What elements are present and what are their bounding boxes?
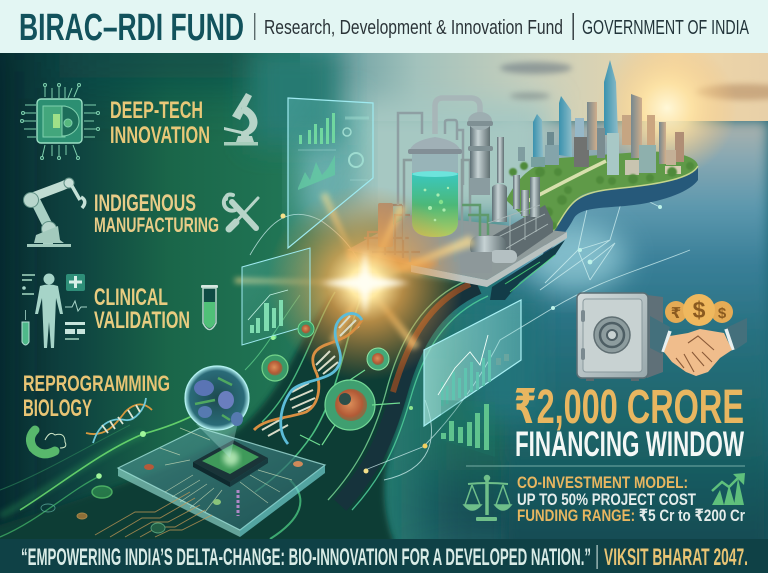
bioreactor [408, 137, 462, 237]
label: indigenous: INDIGENOUS [94, 190, 196, 217]
theme: deep-tech innovation [20, 84, 258, 160]
water band [542, 166, 698, 258]
floating bar chart [441, 400, 489, 450]
label: validation: VALIDATION [94, 307, 190, 334]
project cost share: UP TO 50% PROJECT COST [517, 490, 696, 509]
icon: protein [30, 430, 66, 454]
factory on slab [347, 98, 567, 300]
dark ribbon ground [0, 275, 480, 545]
icon: coins: $ [718, 305, 727, 322]
theme: clinical validation [22, 274, 218, 348]
icon: chip [20, 84, 100, 160]
slab [347, 215, 567, 280]
icon: test tube [201, 285, 218, 330]
icon: coins: $ [693, 297, 706, 323]
icon: scales [464, 476, 511, 521]
pale water inside curve [523, 224, 627, 292]
theme: reprogramming biology [23, 371, 170, 454]
city skyline [518, 60, 684, 175]
icon: small DNA [86, 398, 152, 443]
left pipework [364, 205, 420, 258]
icon: coins [665, 294, 733, 326]
island with city [506, 60, 698, 258]
icon: growth chart [712, 473, 745, 505]
icon: robot arm [24, 178, 85, 247]
magnified cell orb [185, 366, 249, 458]
network lines over the water [250, 190, 690, 480]
footer band [0, 539, 768, 573]
central starburst [235, 185, 475, 381]
icon: human body and data [22, 274, 87, 348]
label: manufacturing: MANUFACTURING [94, 214, 219, 237]
label: innovation: INNOVATION [110, 122, 210, 149]
funding range: FUNDING RANGE: ₹5 Cr to ₹200 Cr [517, 506, 745, 525]
large DNA helix [254, 313, 362, 444]
label: deep-tech: DEEP-TECH [110, 97, 203, 124]
under-slab circuits [490, 240, 565, 300]
hologram panel: upper dashboard [288, 98, 373, 248]
header band [0, 0, 768, 53]
green glow lights [96, 336, 275, 479]
biological cells [262, 321, 400, 445]
sky [300, 53, 768, 121]
pipes [398, 98, 488, 265]
heading: fund name: BIRAC–RDI FUND [19, 7, 244, 49]
label: biology: BIOLOGY [23, 395, 92, 422]
subtitle: Research, Development & Innovation Fund [264, 17, 563, 39]
co-investment model: CO-INVESTMENT MODEL: [517, 473, 688, 492]
road ribbon [0, 280, 488, 539]
funding panel [464, 293, 747, 525]
sea [505, 121, 768, 551]
sun glow over city [602, 53, 732, 166]
label: reprogramming: REPROGRAMMING [23, 371, 170, 396]
circuit traces [41, 486, 212, 537]
distillation column [467, 112, 493, 195]
rungs [262, 316, 359, 436]
glass circuit plate with chip [118, 428, 325, 537]
clouds [500, 62, 768, 100]
theme: indigenous manufacturing [24, 178, 258, 247]
icon: coins: ₹ [671, 305, 681, 322]
right process units [492, 175, 553, 262]
label: clinical: CLINICAL [94, 284, 168, 311]
icon: microscope [224, 93, 258, 146]
island green land [506, 152, 698, 236]
silver tanks [470, 236, 517, 263]
trees [509, 162, 694, 230]
icon: wrench and screwdriver [224, 194, 258, 229]
icon: handshake [650, 316, 747, 376]
hologram panel: middle chart [242, 248, 310, 345]
hologram panel: lower chart [424, 300, 521, 426]
neon streak [0, 434, 143, 516]
icon: safe [577, 293, 663, 381]
